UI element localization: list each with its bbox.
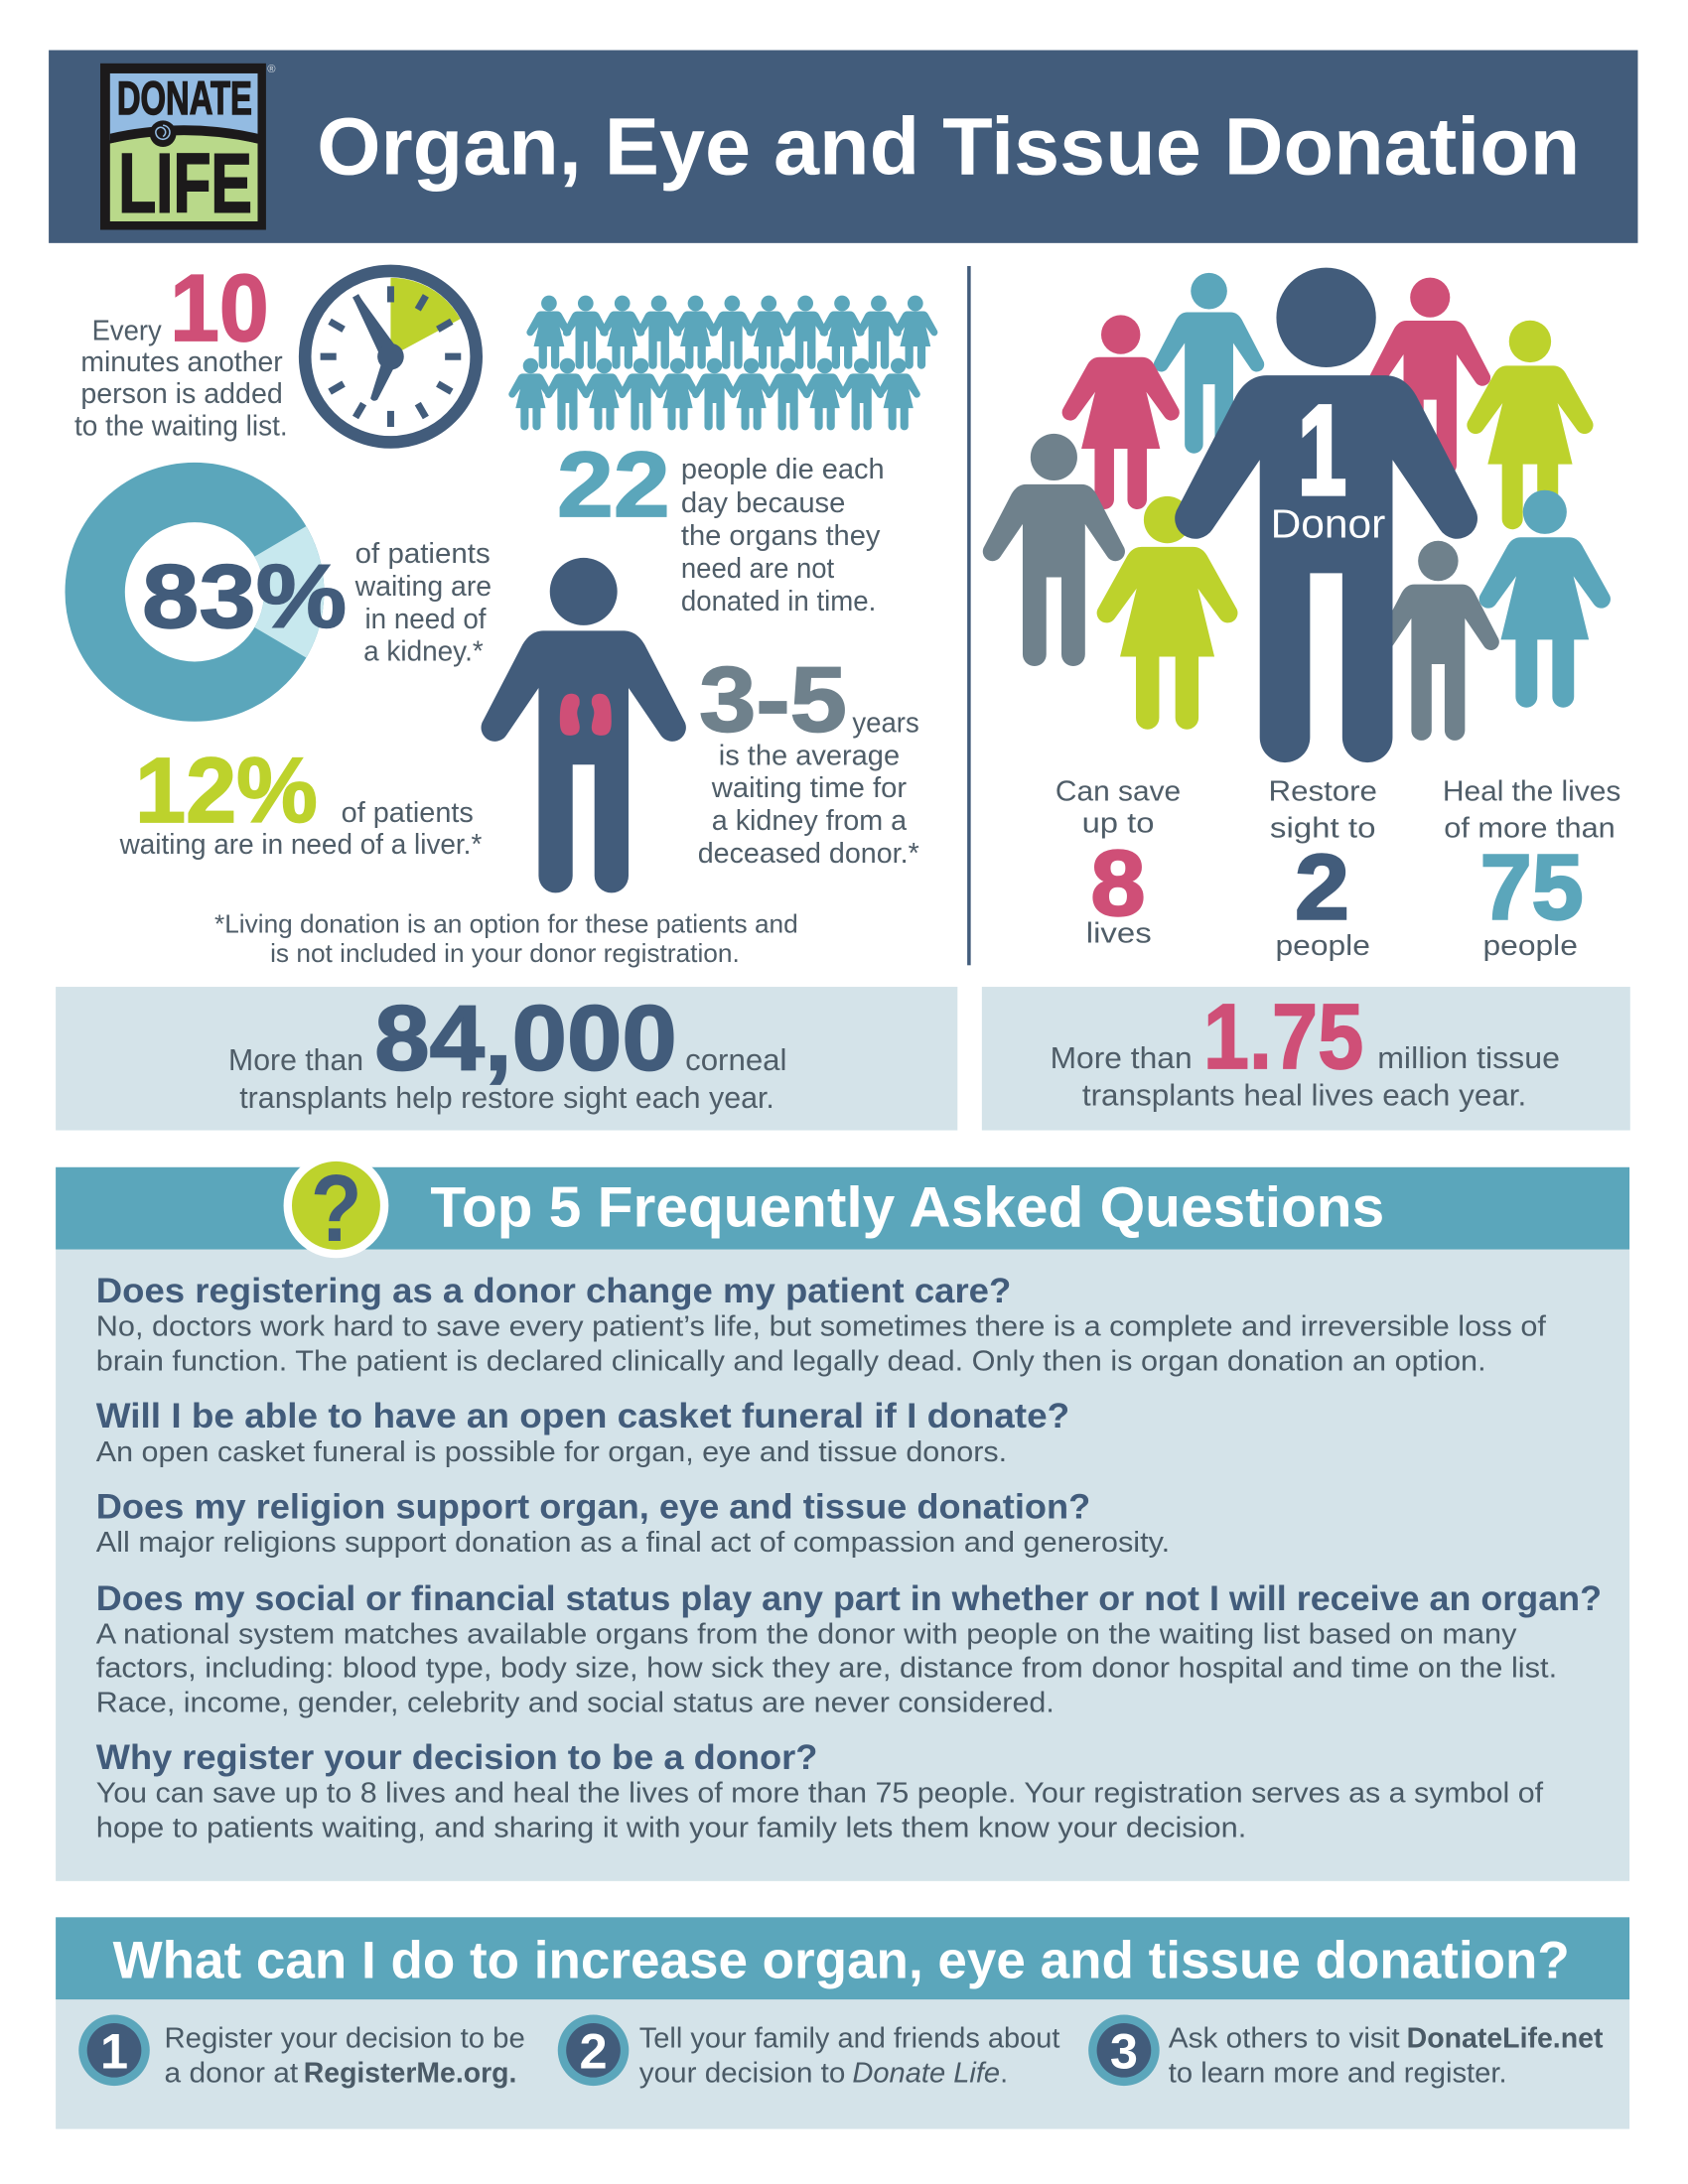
stat: save 8 lives: Can save <box>1055 775 1181 807</box>
icon: question mark badge: ? <box>311 1157 362 1262</box>
text: kidney stat caption: a kidney.* <box>363 636 484 668</box>
step 3: to learn more and register. <box>1169 2058 1507 2090</box>
stat: every 10 minutes: person is added <box>80 378 283 410</box>
stat: 3-5 years wait <box>698 648 919 870</box>
text: kidney stat caption <box>354 538 492 668</box>
stat: every 10 minutes: Every <box>92 315 162 346</box>
stat: 22 people die each day: people die each <box>681 454 885 485</box>
stat: 3-5 years wait: waiting time for <box>711 772 908 804</box>
step 3: 3 <box>1110 2023 1138 2080</box>
icon: clock <box>305 271 477 442</box>
icon: Donate Life logo: LIFE <box>118 136 252 229</box>
step 1: RegisterMe.org. <box>304 2058 516 2090</box>
icon: chain of 22 people <box>509 296 937 430</box>
stat: 12% liver: of patients <box>342 797 474 829</box>
FAQ 1: No, doctors work hard to save every patient’s life, but sometimes there is a complete and irreversible loss of <box>96 1311 1547 1343</box>
panel: frequently asked questions <box>56 1153 1629 1881</box>
FAQ 4: Does my social or financial status play any part in whether or not I will receive an organ? <box>96 1579 1602 1618</box>
FAQ 5: You can save up to 8 lives and heal the lives of more than 75 people. Your registration serves as a symbol of <box>96 1778 1544 1810</box>
stat: 3-5 years wait: 3-5 <box>699 648 847 751</box>
step 2 <box>558 2015 1059 2090</box>
heading: FAQ band: Top 5 Frequently Asked Questions <box>430 1175 1384 1239</box>
step 3: DonateLife.net <box>1407 2022 1604 2055</box>
FAQ 5 <box>96 1738 1544 1844</box>
stat: restore sight to 2 people: sight to <box>1270 813 1376 845</box>
footnote: *Living donation is an option for these patients and <box>214 910 798 938</box>
stat: 22 people die each day: need are not <box>681 553 834 585</box>
FAQ 2 <box>96 1397 1069 1468</box>
stat: heal 75 people <box>1443 775 1620 962</box>
stat: 3-5 years wait: deceased donor.* <box>698 838 919 870</box>
stat: save 8 lives: 8 <box>1091 831 1145 934</box>
step 2: . <box>1000 2058 1008 2090</box>
stat: every 10 minutes <box>74 256 288 442</box>
text: kidney stat caption: of patients <box>355 538 491 570</box>
stat: save 8 lives: up to <box>1082 808 1155 840</box>
divider line <box>967 266 971 965</box>
stat: 3-5 years wait: a kidney from a <box>712 805 907 837</box>
icon: person with kidneys <box>482 558 686 892</box>
step 1: 1 <box>100 2023 128 2080</box>
stat: heal 75 people: people <box>1483 930 1578 962</box>
stat: save 8 lives <box>1055 775 1181 949</box>
illustration: one donor surrounded by recipients <box>983 268 1611 762</box>
illustration: one donor surrounded by recipients: 1 <box>1298 380 1346 522</box>
icon: Donate Life logo: DONATE <box>117 72 252 125</box>
FAQ 5: Why register your decision to be a donor? <box>96 1738 817 1777</box>
icon: question mark badge <box>284 1153 388 1262</box>
stat: save 8 lives: lives <box>1086 917 1152 949</box>
stat: 3-5 years wait: years <box>852 707 919 739</box>
step 1 <box>78 2015 525 2090</box>
stat: 3-5 years wait: is the average <box>719 740 900 771</box>
FAQ 1: Does registering as a donor change my patient care? <box>96 1272 1011 1310</box>
stat: 22 people die each day: donated in time. <box>681 586 876 617</box>
step 3 <box>1088 2015 1604 2090</box>
text: kidney stat caption: in need of <box>364 604 487 635</box>
FAQ 1 <box>96 1272 1547 1378</box>
step 2: 2 <box>579 2023 608 2080</box>
footnote <box>214 910 798 968</box>
FAQ 1: brain function. The patient is declared clinically and legally dead. Only then is organ donation an option. <box>96 1346 1486 1378</box>
stat: 22 people die each day: day because <box>681 487 845 519</box>
stat: 12% liver: waiting are in need of a liver.* <box>119 829 482 861</box>
stat: 22 people die each day: 22 <box>557 433 670 536</box>
heading: FAQ band <box>56 1167 1629 1250</box>
panel: corneal transplants <box>56 987 957 1131</box>
step 3: Ask others to visit <box>1169 2022 1400 2055</box>
FAQ 5: hope to patients waiting, and sharing it with your family lets them know your decision. <box>96 1813 1246 1844</box>
step 2: Tell your family and friends about <box>639 2022 1059 2055</box>
chart: 83% kidney donut: 83% <box>142 546 347 647</box>
FAQ 2: An open casket funeral is possible for organ, eye and tissue donors. <box>96 1436 1007 1468</box>
stat: 22 people die each day <box>557 433 885 617</box>
icon: Donate Life logo: ® <box>267 64 276 75</box>
heading: call to action band <box>56 1917 1629 1999</box>
header banner <box>49 51 1638 243</box>
panel: tissue transplants: 1.75 <box>1203 985 1363 1088</box>
stat: restore sight to 2 people <box>1269 775 1377 962</box>
stat: every 10 minutes: minutes another <box>80 346 283 378</box>
panel: corneal transplants: transplants help restore sight each year. <box>239 1082 774 1115</box>
panel: tissue transplants: million tissue <box>1377 1042 1560 1075</box>
stat: 22 people die each day: the organs they <box>681 520 881 552</box>
title: Organ, Eye and Tissue Donation <box>317 101 1580 192</box>
stat: restore sight to 2 people: people <box>1276 930 1370 962</box>
panel: tissue transplants: More than <box>1051 1042 1193 1075</box>
stat: restore sight to 2 people: Restore <box>1269 775 1377 807</box>
panel: tissue transplants: transplants heal lives each year. <box>1082 1079 1526 1112</box>
step 2: Donate Life <box>852 2058 1000 2090</box>
illustration: one donor surrounded by recipients: Donor <box>1271 501 1385 547</box>
text: kidney stat caption: waiting are <box>354 571 492 603</box>
FAQ 4 <box>96 1579 1602 1718</box>
stat: 12% liver: 12% <box>135 739 318 842</box>
icon: Donate Life logo <box>100 64 276 230</box>
FAQ 4: A national system matches available organs from the donor with people on the waiting list based on many <box>96 1619 1517 1651</box>
FAQ 3 <box>96 1487 1170 1559</box>
heading: call to action band: What can I do to increase organ, eye and tissue donation? <box>113 1931 1570 1989</box>
stat: restore sight to 2 people: 2 <box>1295 835 1349 938</box>
stat: heal 75 people: 75 <box>1480 835 1584 938</box>
panel: corneal transplants: More than <box>228 1044 363 1077</box>
panel: tissue transplants <box>982 985 1630 1131</box>
FAQ 4: Race, income, gender, celebrity and social status are never considered. <box>96 1687 1055 1718</box>
FAQ 2: Will I be able to have an open casket funeral if I donate? <box>96 1397 1069 1435</box>
step 2: your decision to <box>639 2058 845 2090</box>
stat: every 10 minutes: 10 <box>170 256 269 361</box>
stat: heal 75 people: Heal the lives <box>1443 775 1620 807</box>
chart: 83% kidney donut <box>95 492 347 692</box>
panel: what can I do <box>56 1917 1629 2129</box>
FAQ 3: Does my religion support organ, eye and tissue donation? <box>96 1487 1090 1526</box>
FAQ 4: factors, including: blood type, body size, how sick they are, distance from donor hospital and time on the list. <box>96 1652 1557 1684</box>
step 1: a donor at <box>165 2058 298 2090</box>
stat: heal 75 people: of more than <box>1444 813 1616 845</box>
panel: corneal transplants: 84,000 <box>374 987 677 1090</box>
stat: 12% liver <box>119 739 482 861</box>
FAQ 3: All major religions support donation as a final act of compassion and generosity. <box>96 1527 1170 1559</box>
step 1: Register your decision to be <box>165 2022 525 2055</box>
panel: corneal transplants: corneal <box>685 1044 786 1077</box>
stat: every 10 minutes: to the waiting list. <box>74 410 288 442</box>
footnote: is not included in your donor registration. <box>270 940 740 968</box>
